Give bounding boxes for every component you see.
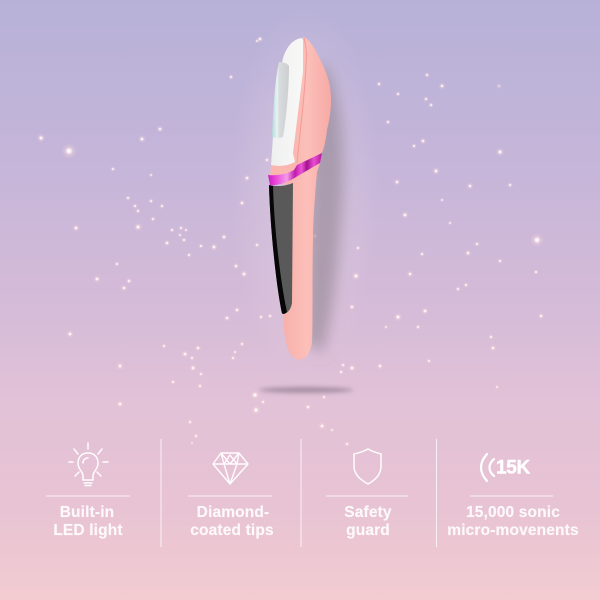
label: built-in LED light: Built-in [60, 504, 114, 521]
sparkles [36, 36, 544, 447]
feature: diamond-coated tips [188, 453, 274, 539]
icon: sonic 15K: 15K [496, 458, 531, 478]
label: diamond-coated tips: coated tips [190, 522, 274, 539]
device [268, 37, 331, 360]
icon: light bulb [69, 443, 108, 486]
icon: diamond [213, 453, 248, 484]
feature: safety guard [326, 449, 408, 539]
label: diamond-coated tips: Diamond- [197, 504, 269, 521]
device seam [297, 38, 306, 163]
label: safety guard: Safety [344, 504, 392, 521]
feature dividers [161, 439, 436, 547]
label: safety guard: guard [346, 522, 390, 539]
glass window [272, 62, 289, 138]
label: 15,000 sonic micro-movenents: micro-movenents [447, 522, 579, 539]
feature: built-in LED light [46, 443, 130, 539]
metallic band [268, 153, 322, 185]
glow behind device [230, 0, 380, 380]
black panel edge [269, 185, 287, 314]
label: built-in LED light: LED light [53, 522, 123, 539]
white tip [271, 38, 303, 166]
black panel [269, 183, 293, 314]
pink transition below tip [270, 162, 299, 178]
ground shadow [259, 387, 353, 393]
icon: shield [354, 449, 381, 484]
feature: 15,000 sonic micro-movements [447, 454, 579, 539]
device shadow [305, 60, 343, 354]
label: 15,000 sonic micro-movenents: 15,000 sonic [466, 504, 560, 521]
device body [283, 37, 331, 360]
